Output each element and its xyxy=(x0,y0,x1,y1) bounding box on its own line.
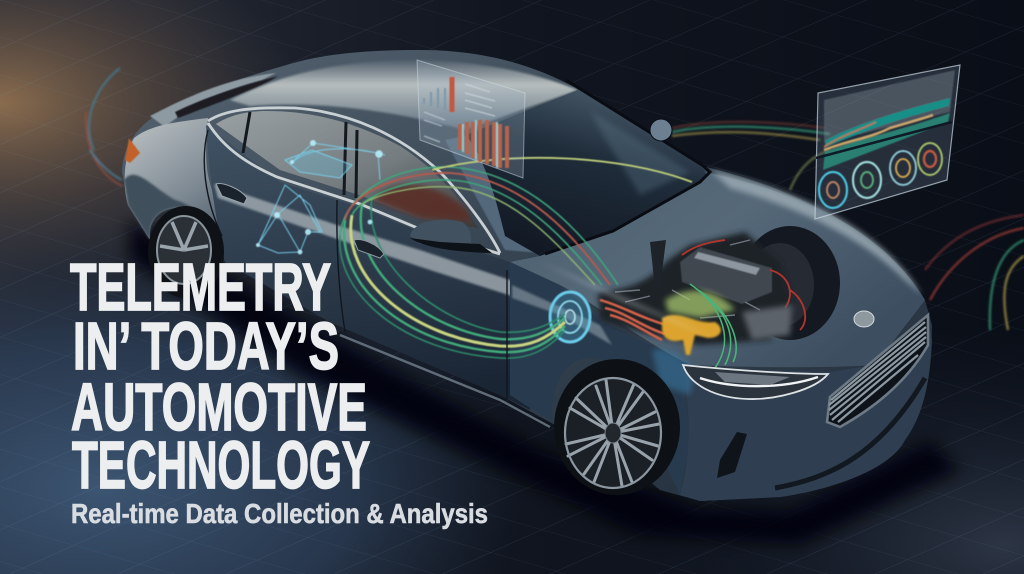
car body silhouette xyxy=(122,50,932,501)
windshield xyxy=(466,90,708,256)
title: IN’ TODAY’S xyxy=(73,309,339,384)
brand badge xyxy=(854,311,874,327)
car illustration xyxy=(122,50,932,501)
telemetry loop lower bundle over the doors xyxy=(340,198,565,358)
front fender xyxy=(510,262,690,495)
tail light xyxy=(125,138,140,163)
right exterior mirror xyxy=(650,119,672,141)
green arcs around the transmission xyxy=(690,284,736,368)
red cable harness xyxy=(600,300,670,340)
title: TECHNOLOGY xyxy=(72,428,370,503)
door shoulder highlight band xyxy=(214,184,600,335)
white light beam haze xyxy=(540,262,720,340)
car ground shadow xyxy=(130,220,960,545)
rear spoiler strip xyxy=(150,73,276,127)
engine wiring xyxy=(682,240,805,330)
tyre hub xyxy=(746,243,814,327)
hood xyxy=(510,172,925,367)
orange transmission glow xyxy=(662,315,721,355)
front grille xyxy=(827,315,928,427)
headlight xyxy=(683,365,828,399)
front wheel xyxy=(554,359,680,495)
engine cover highlight xyxy=(694,252,760,275)
panel gauges xyxy=(819,143,942,208)
fender highlight xyxy=(512,285,612,345)
A pillar xyxy=(445,135,540,253)
hood highlight band xyxy=(710,170,922,295)
door panels xyxy=(206,125,540,410)
spoiler shadow gap xyxy=(175,76,278,118)
yellow-green transmission glow xyxy=(665,291,735,318)
engine lower block xyxy=(742,305,792,340)
front door handle xyxy=(354,240,384,258)
blue glow over fender xyxy=(652,349,695,395)
windshield dark frame xyxy=(545,80,710,254)
panel divider xyxy=(816,122,952,158)
title: AUTOMOTIVE xyxy=(71,370,367,445)
blue sensor network hologram xyxy=(256,140,385,254)
panel bar chart xyxy=(823,70,955,170)
rear door handle xyxy=(216,184,247,204)
title xyxy=(70,250,370,503)
engine cover xyxy=(680,247,772,304)
roof panel xyxy=(230,60,578,130)
rear quarter lower shadow xyxy=(124,175,225,262)
front bumper xyxy=(680,318,932,501)
hologram panel over the windshield xyxy=(417,60,525,178)
brake disc hologram xyxy=(550,292,590,342)
telemetry loop upper bundle to the engine xyxy=(340,158,692,285)
rear quarter panel xyxy=(125,118,225,262)
spare tyre behind the engine xyxy=(740,226,840,340)
intake stalk xyxy=(650,240,666,288)
right holographic dashboard panel xyxy=(815,65,960,219)
engine bay dark mass xyxy=(598,232,792,345)
side mirror xyxy=(410,220,492,253)
interior red seat glow xyxy=(372,185,470,222)
rear wheel xyxy=(148,206,224,298)
lower front lip xyxy=(775,378,925,488)
engine detail speckle xyxy=(615,240,760,318)
window chrome trim xyxy=(208,108,500,254)
title: TELEMETRY xyxy=(70,250,331,325)
background telemetry arcs on the right xyxy=(672,122,1024,330)
windshield reflections xyxy=(590,110,690,195)
subtitle: Real-time Data Collection & Analysis xyxy=(71,498,488,529)
side window glass xyxy=(216,111,478,228)
window pillars xyxy=(243,112,357,198)
background telemetry arcs on the left xyxy=(86,68,122,186)
lower bumper intake xyxy=(717,432,747,478)
rocker sill highlight xyxy=(340,335,550,427)
door shut lines xyxy=(204,130,507,400)
